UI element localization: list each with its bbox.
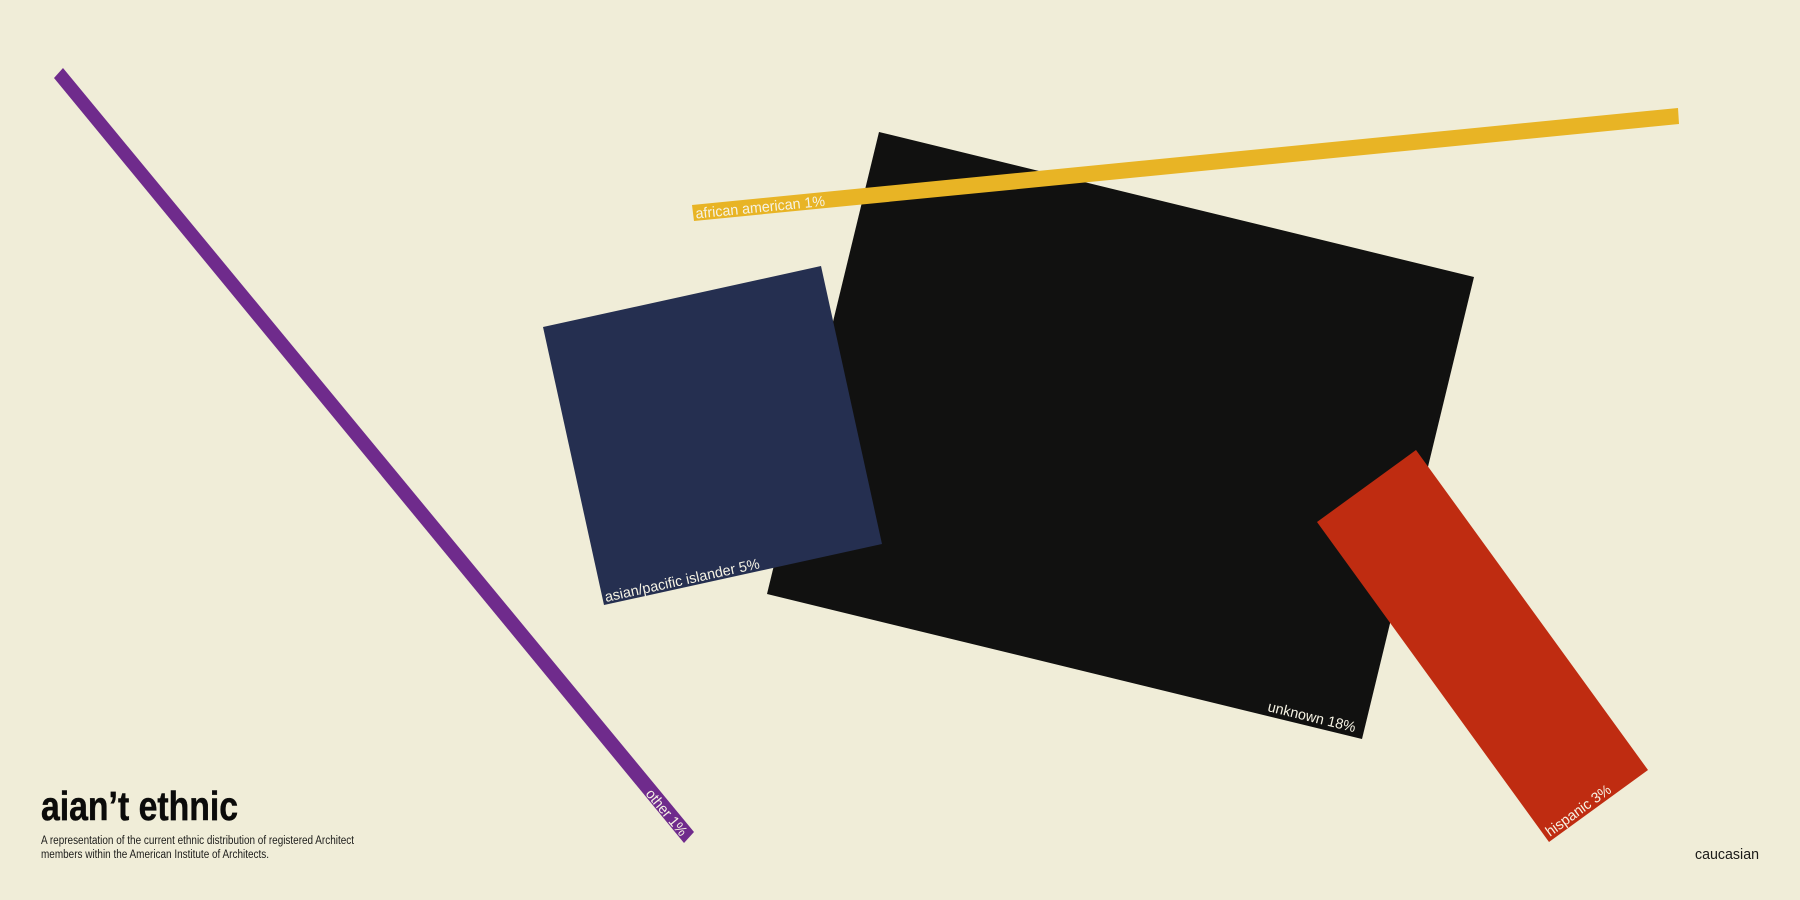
description <box>41 835 355 861</box>
label: hispanic 3%: hispanic 3% <box>1543 782 1615 840</box>
label: other 1%: other 1% <box>642 786 690 840</box>
bar: african american 1% <box>692 108 1679 222</box>
block: asian/pacific islander 5% <box>543 266 882 606</box>
description: A representation of the current ethnic distribution of registered Architect <box>41 835 355 847</box>
label: unknown 18%: unknown 18% <box>1266 699 1357 736</box>
label: african american 1%: african american 1% <box>695 194 826 222</box>
label: caucasian: caucasian <box>1695 847 1759 863</box>
block: unknown 18% <box>767 132 1474 739</box>
description: members within the American Institute of Architects. <box>41 849 269 861</box>
title: aian’t ethnic <box>41 783 238 829</box>
block: hispanic 3% <box>1317 450 1648 842</box>
label: asian/pacific islander 5%: asian/pacific islander 5% <box>603 556 761 606</box>
